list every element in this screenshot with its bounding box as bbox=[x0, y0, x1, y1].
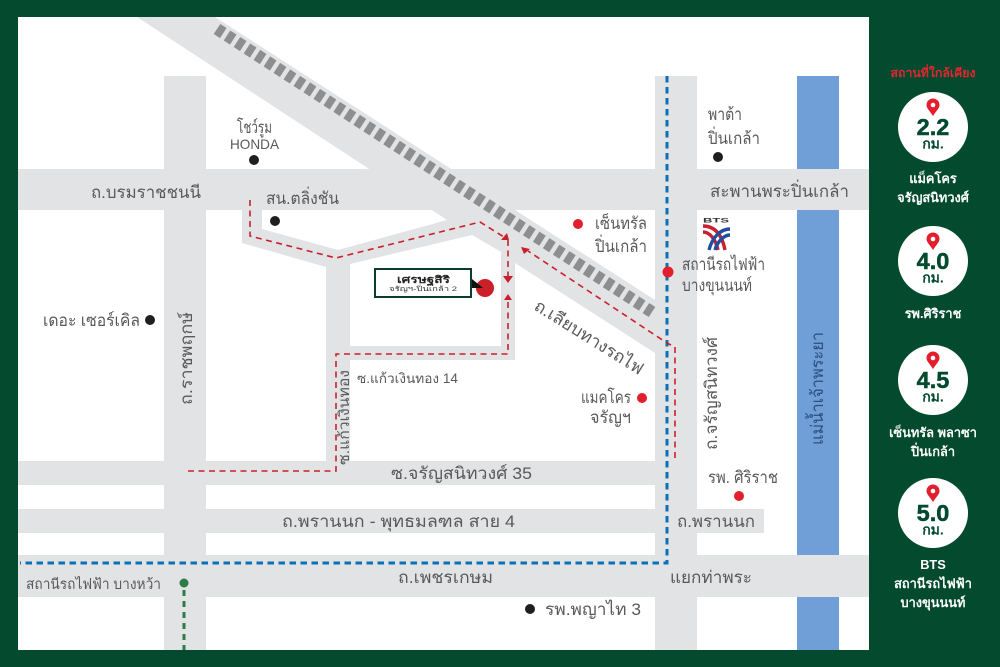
distance badge: Central Plaza: 4.5 bbox=[917, 367, 949, 393]
map labels: ถ.จรัญสนิทวงศ์ bbox=[702, 337, 721, 450]
map labels: ปิ่นเกล้า bbox=[594, 234, 647, 256]
distance badge: Central Plaza: ปิ่นเกล้า bbox=[910, 442, 955, 459]
distance badge: Makro bbox=[897, 92, 970, 206]
map labels: จรัญฯ bbox=[590, 408, 631, 427]
railway bbox=[217, 29, 652, 312]
map labels: รพ.พญาไท 3 bbox=[545, 599, 641, 619]
river bbox=[797, 76, 839, 650]
green rail line bbox=[182, 590, 186, 650]
distance badge: Siriraj: 4.0 bbox=[917, 248, 949, 274]
green station dot bbox=[180, 578, 188, 588]
distance badge: BTS: สถานีรถไฟฟ้า bbox=[894, 575, 972, 591]
panel: nearby places bbox=[889, 64, 977, 611]
map labels: เดอะ เซอร์เคิล bbox=[43, 311, 140, 330]
icon: BTS logo: BTS bbox=[703, 218, 730, 224]
map labels: ถ.พรานนก bbox=[677, 512, 755, 531]
distance badge: BTS bbox=[894, 478, 972, 611]
map labels: สถานีรถไฟฟ้า บางหว้า bbox=[26, 575, 161, 593]
distance badge: Central Plaza bbox=[889, 345, 977, 459]
distance badge: BTS: 5.0 bbox=[917, 500, 949, 526]
distance badge: Siriraj: กม. bbox=[922, 270, 944, 286]
distance badge: Central Plaza: กม. bbox=[922, 388, 944, 404]
distance badge: Makro: แม็คโคร bbox=[909, 170, 957, 186]
map labels: รพ. ศิริราช bbox=[708, 468, 778, 487]
lot block bbox=[350, 235, 501, 346]
map labels: สะพานพระปิ่นเกล้า bbox=[710, 179, 849, 201]
distance badge: BTS: กม. bbox=[922, 522, 944, 538]
BTS line bbox=[20, 76, 667, 563]
route arrows bbox=[188, 200, 675, 471]
distance badge: Central Plaza: เซ็นทรัล พลาซา bbox=[889, 424, 977, 440]
map labels: เซ็นทรัล bbox=[595, 212, 647, 233]
map labels: ซ.แก้วเงินทอง 14 bbox=[357, 371, 458, 386]
map labels: ซ.จรัญสนิทวงศ์ 35 bbox=[391, 464, 532, 483]
map labels: ถ.พรานนก - พุทธมลฑล สาย 4 bbox=[282, 512, 515, 532]
map labels: สน.ตลิ่งชัน bbox=[266, 186, 339, 208]
site sign bbox=[375, 269, 471, 297]
distance badge: Siriraj bbox=[898, 226, 968, 321]
site sign: เศรษฐสิริ bbox=[397, 274, 451, 286]
distance badge: Makro: จรัญสนิทวงศ์ bbox=[897, 190, 970, 206]
distance badge: Siriraj: รพ.ศิริราช bbox=[905, 306, 962, 321]
site marker bbox=[472, 279, 494, 297]
map labels bbox=[26, 105, 849, 619]
black place markers bbox=[145, 152, 723, 614]
distance badge: BTS: บางขุนนนท์ bbox=[901, 595, 965, 611]
map labels: ถ.ราชพฤกษ์ bbox=[177, 312, 196, 405]
map labels: ถ.เลียบทางรถไฟ bbox=[531, 295, 647, 379]
map labels: แยกท่าพระ bbox=[670, 568, 752, 587]
map labels: โชว์รูม bbox=[237, 117, 272, 138]
panel heading: สถานที่ใกล้เคียง bbox=[890, 64, 976, 80]
distance badge: Makro: กม. bbox=[922, 136, 944, 152]
map labels: สถานีรถไฟฟ้า bbox=[682, 254, 765, 274]
map labels: HONDA bbox=[230, 136, 280, 152]
map labels: แมคโคร bbox=[581, 387, 631, 407]
icon: BTS logo bbox=[703, 218, 730, 250]
map labels: แม่น้ำเจ้าพระยา bbox=[805, 332, 827, 445]
distance badge: Makro: 2.2 bbox=[917, 114, 949, 140]
map labels: พาต้า bbox=[708, 105, 742, 124]
map labels: ซ.แก้วเงินทอง bbox=[336, 370, 353, 465]
map labels: ถ.บรมราชชนนี bbox=[91, 183, 201, 202]
map labels: ถ.เพชรเกษม bbox=[398, 568, 493, 587]
red place markers bbox=[573, 219, 744, 501]
distance badge: BTS: BTS bbox=[920, 557, 946, 572]
site sign: จรัญฯ-ปิ่นเกล้า 2 bbox=[389, 284, 458, 293]
map labels: ปิ่นเกล้า bbox=[707, 126, 760, 148]
map labels: บางขุนนนท์ bbox=[682, 276, 752, 296]
